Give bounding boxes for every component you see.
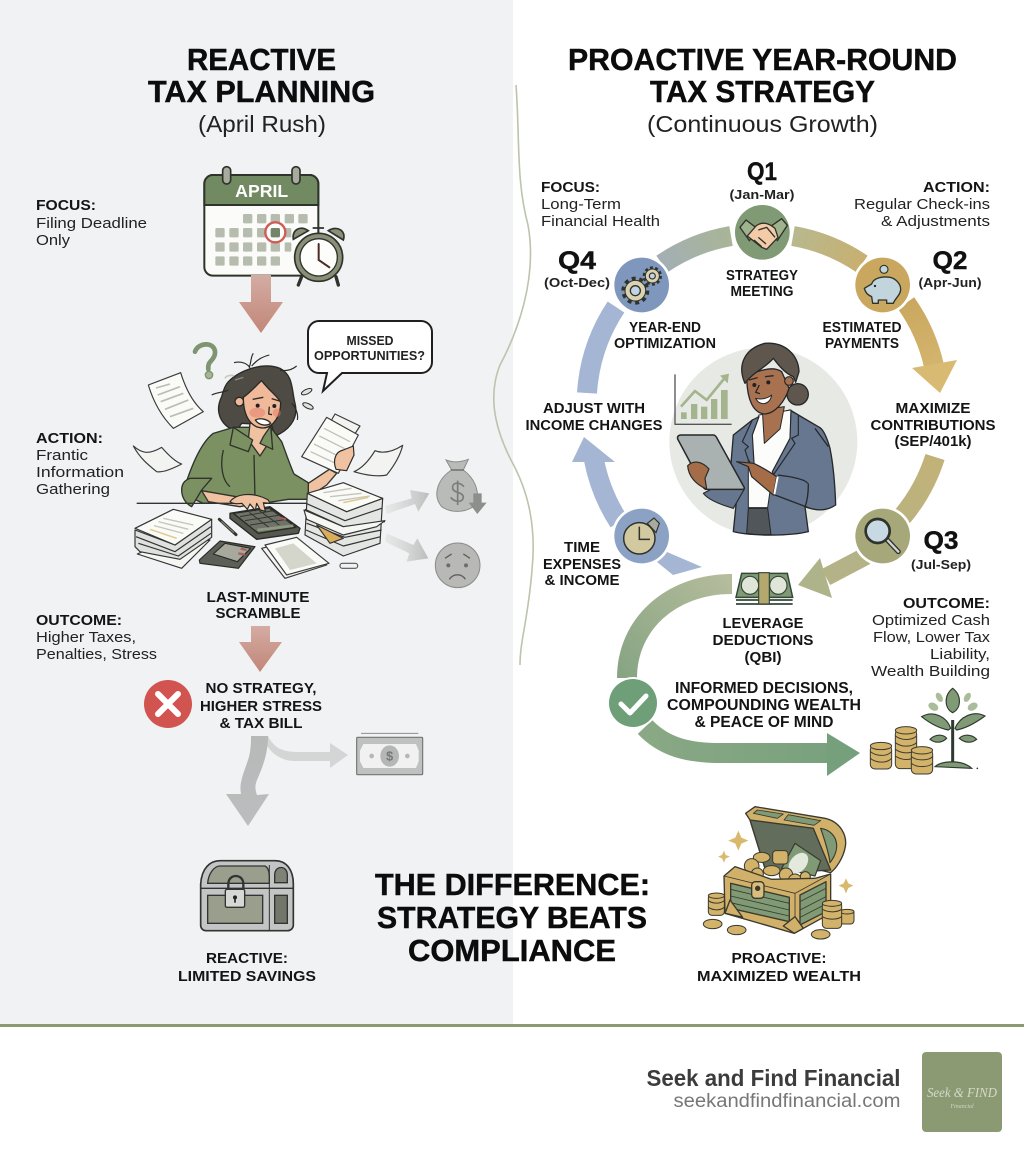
arrow: q2 to maximize (906, 303, 957, 393)
label: q3: Q3 (924, 527, 958, 555)
woman: torso and shirt (184, 423, 337, 503)
label: no strategy: HIGHER STRESS (200, 699, 322, 715)
label: informed decisions: & PEACE OF MIND (694, 714, 834, 731)
chest: body (724, 867, 831, 933)
text block: proactive action (854, 180, 990, 230)
panel: reactive title (148, 43, 375, 137)
text: company name: Seek and Find Financial (646, 1065, 900, 1091)
label: adjust with income changes: ADJUST WITH (543, 401, 645, 417)
illustration: desk with papers and calculators (135, 478, 385, 578)
subheading: continuous growth: (Continuous Growth) (647, 111, 878, 137)
arc: q4 to adjust (587, 307, 616, 393)
woman: face (235, 381, 281, 428)
text block: reactive outcome (36, 613, 157, 663)
label: q4 (544, 247, 610, 290)
label: estimated payments: ESTIMATED (822, 320, 902, 336)
heading: tax planning: TAX PLANNING (148, 75, 375, 109)
text block: proactive outcome: OUTCOME: (903, 596, 990, 612)
arrow: check to growth (645, 727, 860, 776)
label: maximize contributions: CONTRIBUTIONS (870, 418, 996, 434)
arc: deductions to check (627, 584, 732, 678)
text block: reactive action (36, 431, 124, 498)
chart: quarterly cycle ring (572, 236, 957, 776)
label: q2: (Apr-Jun) (918, 275, 982, 290)
text: website: seekandfindfinancial.com (674, 1091, 900, 1112)
icon: locked gray chest (201, 861, 293, 931)
label: proactive maximized wealth: PROACTIVE: (732, 951, 826, 967)
label: q1: Q1 (747, 158, 777, 186)
heading: proactive year-round: PROACTIVE YEAR-ROUND (568, 43, 957, 77)
label: last-minute scramble (206, 590, 310, 622)
illustration: stressed woman (184, 344, 360, 503)
label: informed decisions: COMPOUNDING WEALTH (667, 697, 861, 714)
advisor: jacket (731, 410, 836, 535)
text block: reactive action: Information (36, 464, 124, 481)
label: q4: Q4 (558, 247, 596, 275)
text block: reactive outcome: Penalties, Stress (36, 646, 157, 663)
icon: coins and growing plant (870, 688, 985, 774)
text block: proactive outcome: Optimized Cash (872, 612, 990, 629)
heading: the difference: THE DIFFERENCE: (375, 868, 650, 902)
label: proactive maximized wealth: MAXIMIZED WEALTH (697, 969, 861, 985)
arrow: q3 to deductions (798, 556, 866, 598)
label: reactive limited savings: REACTIVE: (206, 951, 288, 967)
chest: stacked coins (703, 893, 854, 939)
label: strategy meeting: MEETING (730, 284, 794, 300)
panel: wavy divider (494, 85, 533, 665)
panel: proactive title (568, 43, 957, 137)
desk line (137, 501, 307, 505)
chest: lid (746, 807, 846, 873)
label: no strategy: & TAX BILL (220, 716, 303, 732)
text block: proactive focus (541, 180, 660, 230)
advisor: head (787, 384, 808, 405)
icon: money bag (437, 459, 487, 514)
panel: reactive background (0, 0, 513, 1024)
text block: reactive action: Frantic (36, 447, 89, 464)
woman: hair back (219, 366, 296, 436)
advisor: right hand (737, 462, 777, 495)
arrow: calendar to desk (239, 275, 283, 333)
icon: april calendar with alarm clock (204, 167, 344, 285)
icon: center advisor (669, 343, 857, 536)
icon: small calculator (199, 541, 255, 568)
woman: left forearm (182, 478, 263, 507)
arrow: to limited savings (226, 736, 269, 826)
text block: proactive focus: Long-Term (541, 196, 621, 213)
icon: question mark (195, 344, 215, 379)
text block: proactive outcome: Liability, (930, 646, 990, 663)
label: last-minute scramble: LAST-MINUTE (206, 590, 310, 606)
label: q3 (911, 527, 971, 572)
chest: money and coins (782, 843, 821, 876)
label: strategy meeting (726, 268, 798, 300)
label: estimated payments: PAYMENTS (825, 336, 899, 352)
icon: pen (219, 519, 236, 535)
label: maximize contributions: (SEP/401k) (894, 434, 972, 450)
text block: reactive focus (36, 198, 147, 249)
icon: q1 handshake (732, 202, 792, 262)
arrow: to sad face (385, 533, 428, 562)
heading: reactive: REACTIVE (187, 43, 336, 77)
advisor: lapels (742, 411, 798, 475)
arrow: to dollar bill (262, 736, 348, 768)
panel: footer (0, 1024, 1024, 1154)
icon: q4 gears (612, 255, 672, 315)
subheading: april rush: (April Rush) (198, 111, 326, 137)
text block: reactive action: ACTION: (36, 431, 103, 447)
label: maximize contributions: MAXIMIZE (896, 401, 971, 417)
label: proactive maximized wealth (697, 951, 861, 985)
text block: proactive outcome: Flow, Lower Tax (873, 629, 991, 646)
text: april: APRIL (235, 181, 289, 201)
label: reactive limited savings: LIMITED SAVINGS (178, 969, 316, 985)
text block: proactive action: & Adjustments (881, 213, 990, 230)
chart: growth bars (675, 374, 732, 424)
advisor: tablet (677, 435, 744, 489)
advisor: left hand (688, 462, 709, 489)
label: time expenses and income: EXPENSES (543, 557, 621, 573)
advisor: shirt and skirt (748, 410, 791, 508)
arc: contributions to q3 (902, 457, 935, 517)
icon: logo (922, 1052, 1002, 1132)
icon: paper in hand (302, 414, 360, 473)
label: q2 (918, 247, 982, 290)
label: time expenses and income: & INCOME (544, 573, 620, 589)
label: no strategy: NO STRATEGY, (206, 681, 316, 697)
icon: dollar bill: $ (386, 750, 393, 764)
icon: green check (607, 677, 659, 729)
arrow: scramble to no strategy (239, 626, 282, 672)
callout: missed opportunities: OPPORTUNITIES? (314, 348, 425, 363)
icon: paperclip (340, 563, 358, 568)
label: year-end optimization (614, 320, 716, 352)
arc: q1 to q4 (662, 236, 731, 264)
chest: sparkles (718, 831, 853, 893)
label: leverage deductions: (QBI) (744, 650, 782, 666)
heading: the difference: STRATEGY BEATS (377, 901, 647, 935)
text block: reactive focus: Filing Deadline (36, 215, 147, 232)
label: year-end optimization: OPTIMIZATION (614, 336, 716, 352)
label: q2: Q2 (932, 247, 968, 275)
icon: left paper stack (135, 509, 212, 568)
heading: the difference: COMPLIANCE (408, 934, 616, 968)
text block: proactive outcome: Wealth Building (871, 663, 990, 680)
label: q1 (730, 158, 794, 202)
heading: tax strategy: TAX STRATEGY (650, 75, 875, 109)
label: time expenses and income (543, 540, 621, 589)
label: maximize contributions (870, 401, 996, 450)
heading: the difference (375, 868, 650, 968)
icon: right paper stack (304, 483, 385, 556)
icon: main calculator (230, 507, 300, 539)
label: time expenses and income: TIME (564, 540, 600, 556)
label: informed decisions: INFORMED DECISIONS, (675, 680, 853, 697)
label: no strategy (200, 681, 322, 732)
text block: proactive action: ACTION: (923, 180, 990, 196)
icon: sweat drops (301, 387, 314, 411)
callout: missed opportunities (308, 321, 432, 391)
arc: q1 to q2 (793, 236, 862, 264)
label: leverage deductions: LEVERAGE (722, 616, 804, 632)
icon: sad face (435, 543, 480, 588)
woman: hand on calculator (230, 495, 270, 511)
text block: reactive focus: FOCUS: (36, 198, 96, 214)
icon: cash stack (736, 573, 793, 604)
label: leverage deductions (712, 616, 814, 666)
label: year-end optimization: YEAR-END (629, 320, 701, 336)
icon: dollar bill (357, 733, 423, 775)
label: estimated payments (822, 320, 902, 352)
text block: proactive action: Regular Check-ins (854, 196, 990, 213)
illustration: outcome icons (385, 459, 487, 588)
icon: clock (612, 506, 672, 566)
arrow: time to adjust (572, 437, 619, 522)
icon: red x (144, 680, 192, 728)
text block: proactive focus: FOCUS: (541, 180, 600, 196)
text block: reactive action: Gathering (36, 481, 110, 498)
label: reactive limited savings (178, 951, 316, 985)
illustration: flying papers (133, 373, 403, 476)
icon: logo: Financial (949, 1104, 974, 1110)
text block: proactive outcome (871, 596, 991, 680)
arc: time to deductions (657, 552, 702, 575)
advisor: sleeve left (703, 489, 744, 508)
text block: proactive focus: Financial Health (541, 213, 660, 230)
arrow: to money bag (385, 490, 429, 514)
label: q4: (Oct-Dec) (544, 275, 610, 290)
label: adjust with income changes (526, 401, 663, 434)
label: strategy meeting: STRATEGY (726, 268, 798, 284)
label: q3: (Jul-Sep) (911, 557, 971, 572)
label: last-minute scramble: SCRAMBLE (216, 606, 301, 622)
icon: q2 piggy bank (853, 255, 913, 315)
text block: reactive outcome: Higher Taxes, (36, 629, 136, 646)
callout: missed opportunities: MISSED (346, 333, 394, 348)
label: adjust with income changes: INCOME CHANGES (526, 418, 663, 434)
icon: logo: Seek & FIND (927, 1086, 997, 1101)
icon: treasure chest (703, 807, 854, 939)
text block: reactive focus: Only (36, 232, 71, 249)
text block: reactive outcome: OUTCOME: (36, 613, 122, 629)
icon: q3 magnifier (853, 506, 913, 566)
label: leverage deductions: DEDUCTIONS (712, 633, 814, 649)
label: informed decisions (667, 680, 861, 731)
label: q1: (Jan-Mar) (730, 187, 794, 202)
icon: table sheet (262, 537, 329, 578)
